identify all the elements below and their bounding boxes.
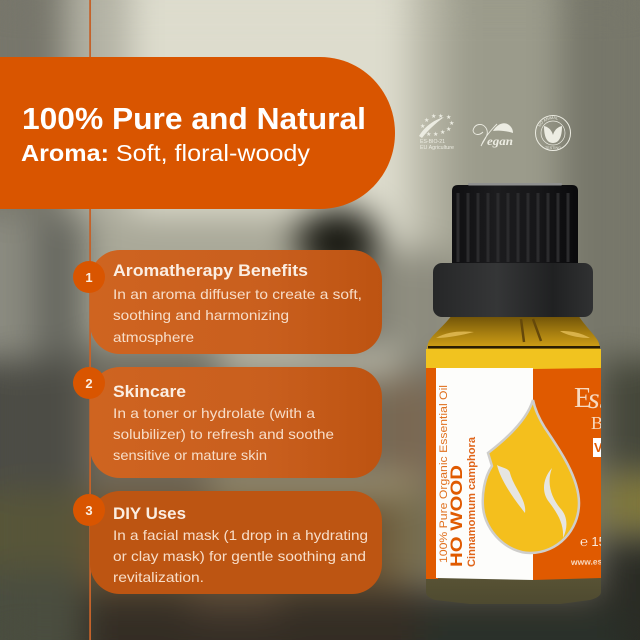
white variant tag bbox=[593, 438, 601, 457]
number badge 1: 1 bbox=[85, 270, 93, 285]
panel 2 body bbox=[113, 405, 334, 463]
icon: EU organic leaf bbox=[419, 113, 454, 151]
number badge 2: 2 bbox=[85, 376, 93, 391]
header banner bbox=[0, 57, 395, 209]
icon: EU organic leaf: ★ bbox=[449, 120, 454, 127]
number badge 3 bbox=[73, 494, 105, 526]
panel 1 body: soothing and harmonizing bbox=[113, 307, 289, 323]
panel 3 body: revitalization. bbox=[113, 569, 204, 585]
panel 1 body bbox=[113, 286, 362, 345]
panel 3 body bbox=[113, 527, 368, 585]
panel 3 body: In a facial mask (1 drop in a hydrating bbox=[113, 527, 368, 543]
number badge 1 bbox=[73, 261, 105, 293]
icon: EU organic leaf: ★ bbox=[420, 123, 425, 130]
bottle glass shoulder bbox=[427, 315, 600, 350]
icon: no animal testing: NO ANIMAL bbox=[538, 116, 558, 127]
label white panel bbox=[436, 368, 533, 580]
label orange panel bbox=[533, 368, 601, 580]
label orange stripe bbox=[426, 368, 438, 579]
cap knurled top bbox=[452, 183, 578, 264]
icon: no animal testing bbox=[535, 115, 571, 151]
drop flame right bbox=[544, 468, 566, 538]
panel 2: skincare bbox=[90, 367, 382, 478]
website: www.essentially bbox=[570, 556, 637, 567]
white variant tag: V bbox=[594, 440, 603, 455]
brand text on label: E bbox=[574, 382, 592, 414]
vertical label text: subtitle: 100% Pure Organic Essential Oil bbox=[438, 385, 450, 563]
oil drop bbox=[483, 400, 579, 553]
panel 1: aromatherapy benefits bbox=[90, 250, 382, 354]
panel 1 body: In an aroma diffuser to create a soft, bbox=[113, 286, 362, 302]
title: 100% Pure and Natural bbox=[22, 101, 366, 136]
vertical label text: product name: HO WOOD bbox=[447, 465, 466, 567]
timeline line bbox=[89, 0, 91, 640]
icon: EU organic leaf: ★ bbox=[431, 113, 436, 120]
icon: EU organic leaf: ★ bbox=[446, 126, 451, 133]
cap collar bbox=[433, 263, 593, 317]
icon: EU organic leaf: ★ bbox=[426, 131, 431, 138]
vertical label text: botanical name: Cinnamomum camphora bbox=[466, 436, 478, 567]
bottle body bbox=[426, 349, 601, 604]
panel 2 body: sensitive or mature skin bbox=[113, 447, 267, 463]
volume: ℮ 15 bbox=[580, 534, 606, 549]
brand text on label: ss bbox=[588, 382, 611, 415]
panel 3 heading: DIY Uses bbox=[113, 504, 186, 523]
number badge 2 bbox=[73, 367, 105, 399]
panel 1 heading: Aromatherapy Benefits bbox=[113, 261, 308, 280]
panel 2 heading: Skincare bbox=[113, 382, 186, 401]
icon: EU organic leaf: ★ bbox=[438, 113, 443, 120]
panel 2 body: solubilizer) to refresh and soothe bbox=[113, 426, 334, 442]
panel 2 body: In a toner or hydrolate (with a bbox=[113, 405, 315, 421]
panel 3 body: or clay mask) for gentle soothing and bbox=[113, 548, 366, 564]
panel 3: DIY uses bbox=[90, 491, 382, 594]
icon: EU organic leaf: ★ bbox=[424, 117, 429, 124]
drop flame left bbox=[497, 465, 525, 513]
subtitle: aroma: Aroma: Soft, floral-woody bbox=[21, 140, 311, 166]
icon: EU organic leaf: ES-BIO-21 bbox=[420, 139, 445, 145]
icon: EU organic leaf: ★ bbox=[440, 129, 445, 136]
icon: EU organic leaf: ★ bbox=[433, 131, 438, 138]
brand text on label: B bbox=[591, 413, 603, 433]
icon: EU organic leaf: EU Agriculture bbox=[420, 145, 454, 151]
icon: vegan bbox=[473, 123, 513, 148]
bottle bbox=[426, 183, 601, 604]
icon: vegan: egan bbox=[487, 134, 513, 148]
number badge 3: 3 bbox=[85, 503, 93, 518]
icon: EU organic leaf: ★ bbox=[446, 114, 451, 121]
panel 1 body: atmosphere bbox=[113, 329, 194, 345]
brand text on label bbox=[574, 388, 601, 429]
icon: no animal testing: TESTING bbox=[545, 146, 561, 150]
